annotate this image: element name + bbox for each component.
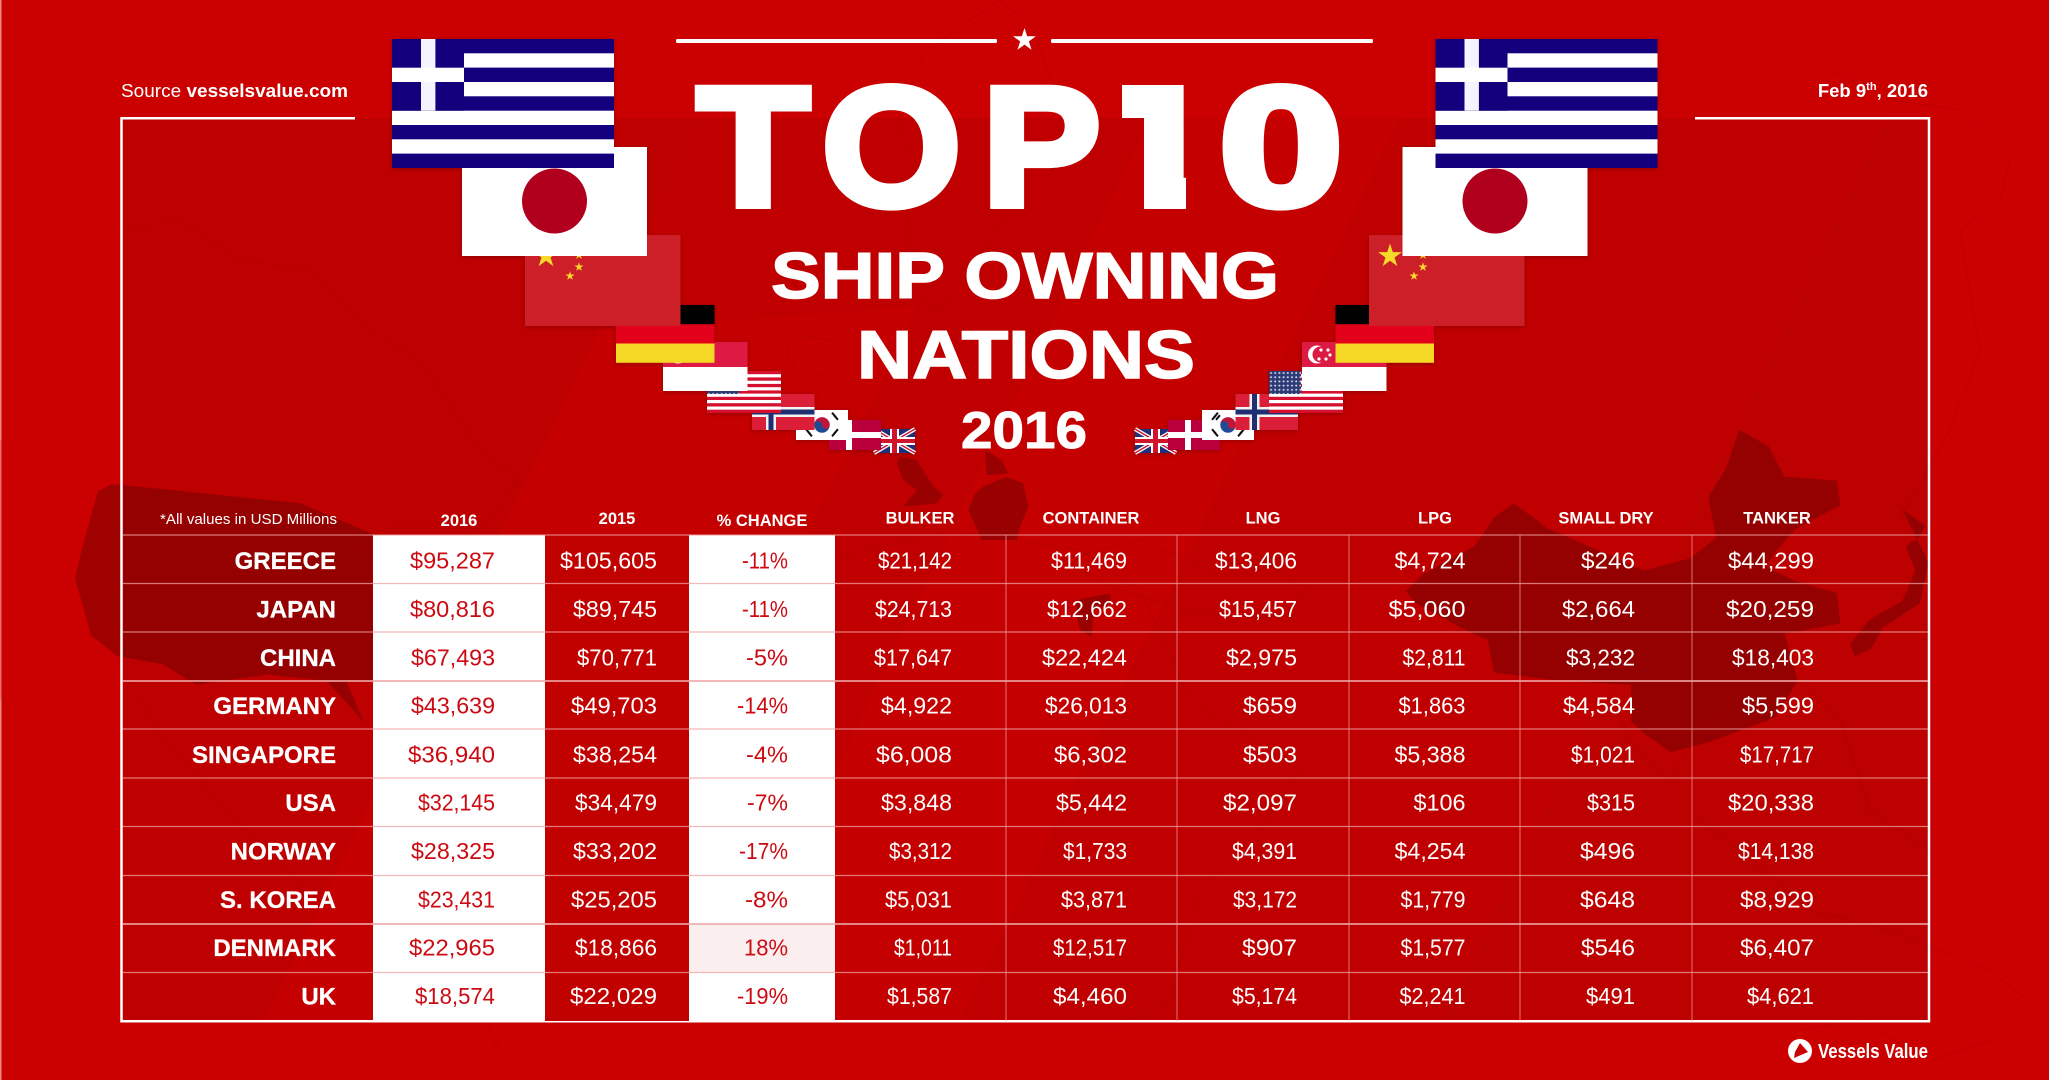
grid lines [123, 535, 1928, 1021]
row: Denmark: $1,011 [894, 934, 952, 960]
row: Japan: $15,457 [1219, 596, 1297, 622]
row: Singapore: $6,302 [1054, 742, 1127, 768]
data table [123, 510, 1928, 1021]
table header: TANKER [1743, 510, 1811, 528]
row: China: -5% [746, 644, 788, 670]
row: Denmark: $907 [1242, 934, 1297, 960]
row: Greece: -11% [742, 548, 788, 574]
row: Greece: $44,299 [1728, 548, 1814, 574]
title: TOP10: T [697, 52, 810, 241]
subtitle: NATIONS: NATIONS [857, 317, 1195, 393]
row: Greece: $13,406 [1215, 548, 1297, 574]
title: TOP10: 1 [1111, 52, 1205, 241]
row: Denmark [213, 934, 1814, 962]
table header: SMALL DRY [1558, 510, 1654, 528]
table header: 2016 [441, 512, 477, 530]
row: UK: -19% [737, 983, 788, 1009]
row: Denmark: $12,517 [1053, 934, 1127, 960]
row: Norway: $14,138 [1738, 838, 1814, 864]
row: Greece: $95,287 [410, 548, 495, 574]
row: China: $2,975 [1226, 644, 1297, 670]
row: China: $18,403 [1732, 644, 1814, 670]
row: Denmark: $546 [1581, 934, 1635, 960]
row: China: $17,647 [874, 644, 952, 670]
row: USA: $3,848 [881, 790, 952, 816]
row: Germany: $5,599 [1742, 692, 1814, 718]
row: Norway: NORWAY [231, 838, 336, 866]
row: S. Korea: $5,031 [885, 886, 952, 912]
row: Singapore: $5,388 [1394, 742, 1466, 768]
table header: LPG [1418, 510, 1452, 528]
row: Japan: $5,060 [1388, 596, 1466, 622]
row: China: $67,493 [411, 644, 495, 670]
row: UK: $4,460 [1053, 983, 1127, 1009]
row: Singapore: $17,717 [1740, 742, 1814, 768]
row: S. Korea: S. KOREA [220, 887, 336, 914]
table header: LNG [1246, 510, 1280, 528]
row: S. Korea: $3,172 [1233, 886, 1297, 912]
title: TOP10: P [983, 52, 1101, 241]
row: Singapore: SINGAPORE [192, 742, 336, 769]
row: Greece: $105,605 [560, 548, 657, 574]
row: S. Korea: $3,871 [1061, 886, 1127, 912]
date: , 2016 [1877, 80, 1928, 101]
row: S. Korea: -8% [745, 886, 788, 912]
row: S. Korea [220, 886, 1814, 914]
2015 column fill [545, 535, 689, 1021]
row: USA: $315 [1587, 790, 1635, 816]
table header: *All values in USD Millions [160, 511, 337, 528]
row: Norway: $33,202 [573, 838, 657, 864]
row: Germany: $26,013 [1045, 692, 1127, 718]
table header: BULKER [886, 510, 954, 528]
row: Singapore: -4% [746, 742, 788, 768]
row: UK: $18,574 [415, 983, 495, 1009]
row: Germany: GERMANY [213, 693, 336, 720]
row: China: CHINA [260, 645, 336, 672]
table header: 2015 [599, 510, 635, 528]
row: USA: $5,442 [1056, 790, 1127, 816]
row: USA: $34,479 [575, 790, 657, 816]
row: Greece: GREECE [235, 548, 336, 575]
row: Singapore [192, 742, 1814, 769]
row: Singapore: $503 [1243, 742, 1297, 768]
row: USA: -7% [747, 790, 788, 816]
row: Germany: $43,639 [411, 692, 495, 718]
row: Norway: $496 [1580, 838, 1635, 864]
row: Denmark: DENMARK [213, 935, 337, 962]
row: Singapore: $36,940 [408, 742, 495, 768]
row: Greece: $4,724 [1394, 548, 1466, 574]
row: Germany: $4,584 [1563, 692, 1635, 718]
row: Japan: $89,745 [573, 596, 657, 622]
subtitle: SHIP OWNING: SHIP OWNING [771, 239, 1279, 312]
white column fills [373, 535, 835, 1021]
row: Singapore: $38,254 [573, 742, 657, 768]
row: UK: $4,621 [1747, 983, 1814, 1009]
row: Norway: $4,391 [1232, 838, 1297, 864]
row: USA [285, 790, 1814, 817]
date: th [1866, 81, 1877, 93]
row: S. Korea: $8,929 [1740, 886, 1814, 912]
row: Denmark: $18,866 [575, 934, 657, 960]
row: China: $3,232 [1566, 644, 1635, 670]
row: Germany: $4,922 [881, 692, 952, 718]
title: TOP10: O [822, 52, 961, 241]
row: Germany: -14% [737, 692, 788, 718]
row: China [260, 644, 1814, 672]
row: Norway [231, 838, 1814, 866]
row: Singapore: $6,008 [876, 742, 952, 768]
row: Greece: $246 [1581, 548, 1635, 574]
row: Germany: $49,703 [571, 692, 657, 718]
row: Denmark: $22,965 [409, 934, 495, 960]
table header: CONTAINER [1043, 510, 1140, 528]
row: Norway: $3,312 [889, 838, 952, 864]
flags: left cascade [392, 39, 915, 453]
row: S. Korea: $23,431 [418, 886, 495, 912]
year 2016: 2016 [961, 402, 1087, 460]
row: Denmark: $1,577 [1400, 934, 1466, 960]
row: Germany: $1,863 [1398, 692, 1466, 718]
row: Norway: $1,733 [1063, 838, 1127, 864]
table header [160, 510, 1811, 530]
row: USA: $2,097 [1223, 790, 1297, 816]
row: Japan: $24,713 [875, 596, 952, 622]
row: China: $70,771 [577, 644, 657, 670]
title: TOP10: 0 [1219, 52, 1343, 241]
row: Greece: $21,142 [878, 548, 952, 574]
row: Japan: $12,662 [1047, 596, 1127, 622]
flags: right cascade [1135, 39, 1658, 453]
row: UK: $5,174 [1232, 983, 1297, 1009]
row: Denmark: 18% [744, 934, 788, 960]
row: UK [301, 983, 1814, 1010]
title: TOP10 [694, 83, 1340, 211]
row: Singapore: $1,021 [1571, 742, 1635, 768]
row: UK: $2,241 [1400, 983, 1466, 1009]
row: Japan: $80,816 [410, 596, 495, 622]
row: UK: $22,029 [570, 983, 657, 1009]
row: Norway: $28,325 [411, 838, 495, 864]
row: Japan: -11% [742, 596, 788, 622]
row: S. Korea: $1,779 [1400, 886, 1466, 912]
row: UK: UK [301, 984, 337, 1010]
row: Japan [256, 596, 1814, 624]
row: USA: $20,338 [1728, 790, 1814, 816]
row: UK: $491 [1586, 983, 1635, 1009]
row: USA: $32,145 [418, 790, 495, 816]
row: Japan: $20,259 [1726, 596, 1814, 622]
table frame [122, 118, 1929, 1021]
logo: VesselsValue [1788, 1039, 1928, 1063]
table header: % CHANGE [717, 512, 807, 530]
row: S. Korea: $25,205 [571, 886, 657, 912]
row: Germany: $659 [1243, 692, 1297, 718]
title rule with star [676, 28, 1373, 50]
row: USA: $106 [1414, 790, 1466, 816]
row: Greece [235, 548, 1814, 575]
row: Norway: -17% [739, 838, 788, 864]
row: UK: $1,587 [887, 983, 952, 1009]
logo: VesselsValue: Vessels Value [1818, 1041, 1928, 1063]
date: Feb 9 [1818, 80, 1866, 101]
source credit: Source vesselsvalue.com [121, 80, 348, 101]
row: Japan: $2,664 [1562, 596, 1635, 622]
row: Norway: $4,254 [1394, 838, 1466, 864]
row: Japan: JAPAN [256, 596, 336, 624]
row: S. Korea: $648 [1580, 886, 1635, 912]
row: China: $2,811 [1402, 644, 1466, 670]
row: Greece: $11,469 [1051, 548, 1127, 574]
row: Denmark: $6,407 [1740, 934, 1814, 960]
row: China: $22,424 [1042, 644, 1127, 670]
row: Germany [213, 692, 1814, 720]
row: USA: USA [285, 790, 336, 817]
